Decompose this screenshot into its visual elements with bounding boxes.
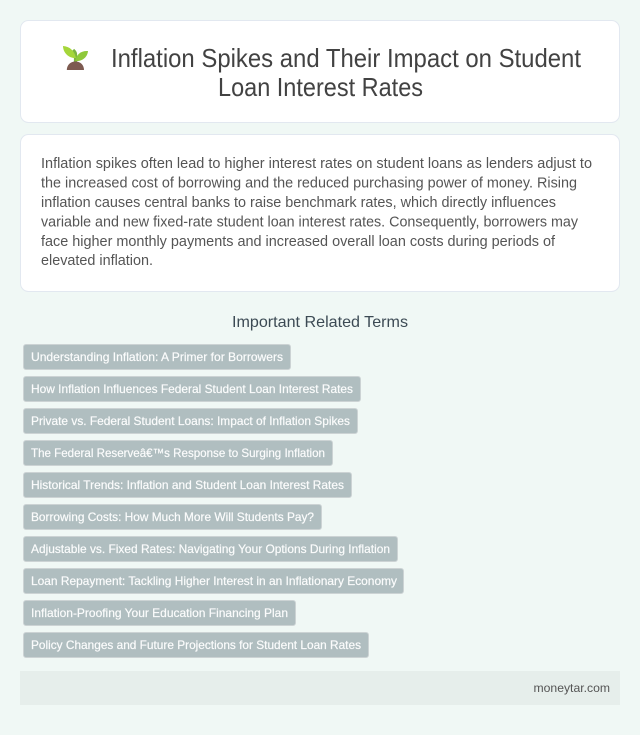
tag 2: How Inflation Influences Federal Student Loan Interest Rates	[31, 382, 353, 396]
summary text: variable and new fixed-rate student loan interest rates. Consequently, borrowers may	[41, 214, 579, 230]
tag 2	[24, 376, 360, 402]
footer	[20, 671, 620, 705]
tag 3: Private vs. Federal Student Loans: Impact of Inflation Spikes	[31, 414, 350, 428]
summary text: the increased cost of borrowing and the reduced purchasing power of money. Rising	[41, 176, 577, 192]
summary text: elevated inflation.	[41, 253, 153, 269]
icon: sprout	[63, 46, 88, 70]
tag 4: The Federal Reserveâ€™s Response to Surging Inflation	[31, 446, 325, 460]
summary text: Inflation spikes often lead to higher interest rates on student loans as lenders adjust to	[41, 156, 592, 172]
tag 1	[24, 344, 290, 370]
summary text: inflation causes central banks to raise benchmark rates, which directly influences	[41, 195, 556, 211]
title	[111, 45, 581, 102]
tag 3	[24, 408, 358, 434]
tag 5: Historical Trends: Inflation and Student Loan Interest Rates	[31, 478, 344, 492]
panel: title card	[20, 20, 620, 122]
tag 9	[24, 600, 296, 626]
tag 10: Policy Changes and Future Projections for Student Loan Rates	[31, 638, 361, 652]
footer source: moneytar.com	[534, 681, 610, 695]
title: Inflation Spikes and Their Impact on Student	[111, 45, 581, 73]
tag 5	[24, 472, 352, 498]
tag 9: Inflation-Proofing Your Education Financing Plan	[31, 606, 288, 620]
tag 7: Adjustable vs. Fixed Rates: Navigating Your Options During Inflation	[31, 542, 390, 556]
tag 8	[24, 568, 404, 594]
tag 1: Understanding Inflation: A Primer for Borrowers	[31, 350, 283, 364]
panel: summary card	[20, 134, 620, 292]
summary text: face higher monthly payments and increased overall loan costs during periods of	[41, 234, 556, 250]
tag 4	[24, 440, 332, 466]
tag 6	[24, 504, 322, 530]
summary text	[41, 156, 592, 269]
tag 7	[24, 536, 398, 562]
tag 10	[24, 632, 368, 658]
title: Loan Interest Rates	[218, 74, 423, 102]
heading: important related terms: Important Related Terms	[232, 314, 408, 331]
tag 6: Borrowing Costs: How Much More Will Students Pay?	[31, 510, 314, 524]
tag 8: Loan Repayment: Tackling Higher Interest in an Inflationary Economy	[31, 574, 397, 588]
tag list	[24, 344, 404, 658]
